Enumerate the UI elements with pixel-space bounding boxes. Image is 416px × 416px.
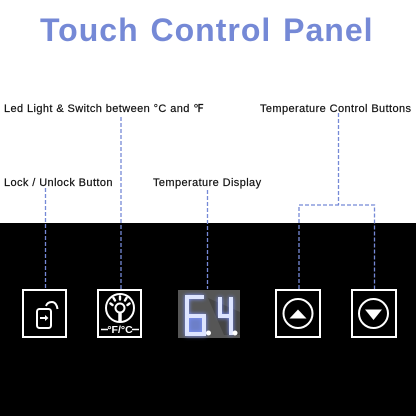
temperature display — [178, 290, 240, 338]
label: temperature control buttons: Temperature Control Buttons — [260, 103, 411, 115]
label: temperature display: Temperature Display — [153, 177, 261, 189]
icon: lock button — [23, 290, 66, 337]
icon: light and unit switch — [98, 290, 141, 337]
label: LED light and unit switch: Led Light & Switch between °C and ℉ — [4, 103, 204, 115]
icon text: unit switch: °F/°C — [107, 324, 133, 336]
black control panel — [0, 223, 416, 416]
icon: up button — [276, 290, 320, 337]
title: Touch Control Panel — [40, 12, 374, 48]
dashed connector lines — [46, 113, 374, 289]
label: lock button: Lock / Unlock Button — [4, 177, 113, 189]
icon: down button — [352, 290, 396, 337]
